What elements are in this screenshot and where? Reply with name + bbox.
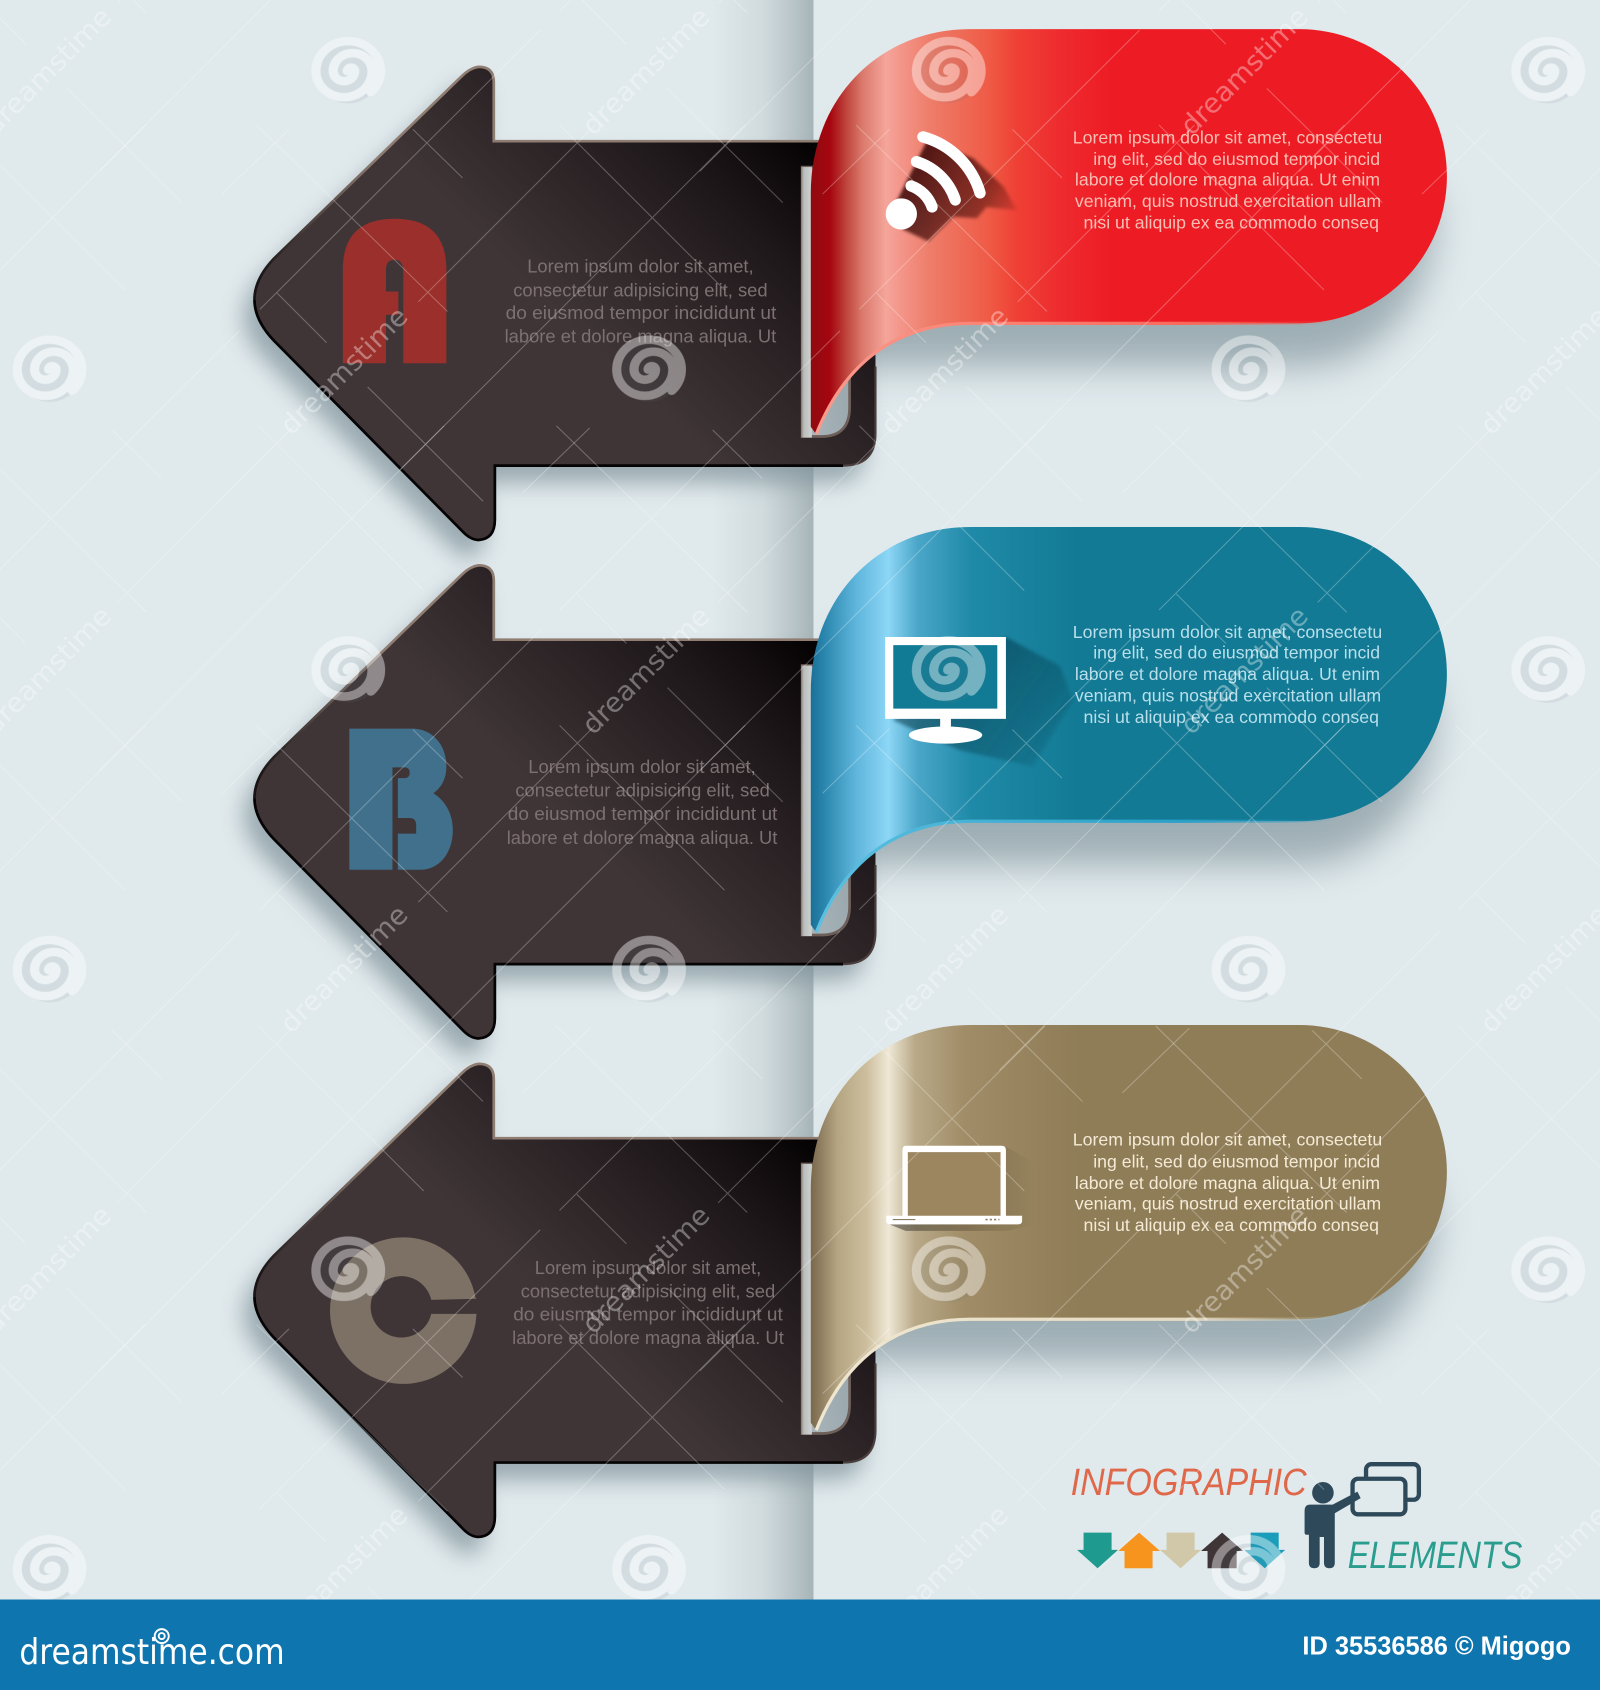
red ribbon text: ing elit, sed do eiusmod tempor incid xyxy=(1093,149,1380,169)
arrow B text xyxy=(507,756,777,848)
tan ribbon text xyxy=(1073,1130,1382,1235)
ribbon panel blue xyxy=(811,527,1447,932)
watermark words: dreamstime xyxy=(875,301,1015,441)
arrow A body xyxy=(254,67,875,540)
blue ribbon text: veniam, quis nostrud exercitation ullam xyxy=(1075,686,1381,706)
page fold shadow xyxy=(712,0,813,1606)
arrow A shadow xyxy=(244,84,865,557)
arrow A text xyxy=(505,256,776,347)
red ribbon shadow xyxy=(841,140,1434,366)
icon: wifi xyxy=(886,137,1017,241)
arrow panel C xyxy=(244,1064,875,1554)
arrow B slot xyxy=(801,666,850,936)
arrow C text: labore et dolore magna aliqua. Ut xyxy=(512,1327,784,1348)
watermark words: dreamstime xyxy=(1175,2,1315,142)
small arrow row xyxy=(1077,1533,1285,1568)
icon: laptop xyxy=(886,1146,1035,1231)
red ribbon body xyxy=(811,29,1447,434)
footer bar xyxy=(0,1599,1600,1690)
blue ribbon text: nisi ut aliquip ex ea commodo conseq xyxy=(1084,707,1379,727)
arrow A text: Lorem ipsum dolor sit amet, xyxy=(527,256,754,277)
arrow C top edge xyxy=(254,1064,830,1297)
arrow panel B xyxy=(244,565,875,1056)
arrow A slot xyxy=(801,167,850,438)
logo: infographic elements xyxy=(1071,1461,1522,1576)
arrow B text: Lorem ipsum dolor sit amet, xyxy=(528,756,756,777)
blue ribbon highlight xyxy=(816,818,1337,932)
heading: elements: ELEMENTS xyxy=(1348,1534,1522,1576)
arrow A text: consectetur adipisicing elit, sed xyxy=(513,279,768,300)
arrow A text: do eiusmod tempor incididunt ut xyxy=(506,302,776,323)
watermark words: dreamstime xyxy=(576,1200,716,1340)
footer brand spiral xyxy=(155,1629,169,1643)
icon: monitor xyxy=(885,637,1073,766)
blue ribbon body xyxy=(811,527,1447,932)
red ribbon text: nisi ut aliquip ex ea commodo conseq xyxy=(1084,212,1379,232)
icon: presenter xyxy=(1305,1464,1419,1568)
arrow panel A xyxy=(244,67,875,557)
watermark words: dreamstime xyxy=(576,601,716,741)
arrow A corner edge xyxy=(843,366,875,466)
tan ribbon text: nisi ut aliquip ex ea commodo conseq xyxy=(1084,1215,1379,1235)
heading: infographic: INFOGRAPHIC xyxy=(1071,1461,1307,1503)
arrow B bottom edge xyxy=(254,798,843,1038)
arrow B text: do eiusmod tempor incididunt ut xyxy=(508,803,777,824)
blue ribbon text: labore et dolore magna aliqua. Ut enim xyxy=(1075,664,1380,684)
blue ribbon text: Lorem ipsum dolor sit amet, consectetu xyxy=(1073,622,1382,642)
arrow C text xyxy=(512,1257,784,1348)
arrow C slot xyxy=(801,1164,850,1435)
watermark words: dreamstime xyxy=(274,301,414,441)
arrow A bottom edge xyxy=(254,300,843,540)
tan ribbon text: labore et dolore magna aliqua. Ut enim xyxy=(1075,1173,1380,1193)
watermark words: dreamstime xyxy=(1175,601,1315,741)
arrow C corner edge xyxy=(843,1363,875,1463)
watermark words: dreamstime xyxy=(875,899,1015,1039)
arrow C bottom edge xyxy=(254,1297,843,1537)
tan ribbon text: Lorem ipsum dolor sit amet, consectetu xyxy=(1073,1130,1382,1150)
arrow B text: labore et dolore magna aliqua. Ut xyxy=(507,827,777,848)
letter A xyxy=(343,219,446,363)
letter B xyxy=(349,729,453,870)
arrow B body xyxy=(254,565,875,1038)
blue ribbon shadow xyxy=(841,638,1434,864)
tan ribbon text: ing elit, sed do eiusmod tempor incid xyxy=(1093,1151,1380,1171)
tan ribbon highlight xyxy=(816,1316,1337,1430)
arrow C shadow xyxy=(244,1081,865,1554)
arrow B shadow xyxy=(244,583,865,1056)
arrow C text: do eiusmod tempor incididunt ut xyxy=(513,1303,783,1324)
red ribbon text: veniam, quis nostrud exercitation ullam xyxy=(1075,191,1381,211)
footer image id: ID 35536586 © Migogo xyxy=(1302,1632,1571,1660)
arrow B corner edge xyxy=(843,865,875,964)
letter C xyxy=(330,1237,477,1384)
red ribbon text xyxy=(1073,127,1382,232)
arrow B top edge xyxy=(254,565,830,798)
arrow A text: labore et dolore magna aliqua. Ut xyxy=(505,326,776,347)
arrow C text: Lorem ipsum dolor sit amet, xyxy=(535,1257,761,1278)
tan ribbon text: veniam, quis nostrud exercitation ullam xyxy=(1075,1193,1381,1213)
footer brand: dreamstime.com xyxy=(19,1632,285,1673)
arrow C body xyxy=(254,1064,875,1537)
arrow C text: consectetur adipisicing elit, sed xyxy=(521,1281,775,1302)
blue ribbon text xyxy=(1073,622,1382,727)
blue ribbon text: ing elit, sed do eiusmod tempor incid xyxy=(1093,643,1380,663)
watermark words: dreamstime xyxy=(875,1500,1015,1640)
red ribbon highlight xyxy=(816,320,1337,434)
tan ribbon body xyxy=(811,1025,1447,1430)
arrow B text: consectetur adipisicing elit, sed xyxy=(515,780,770,800)
watermark words: dreamstime xyxy=(576,2,716,142)
tan ribbon shadow xyxy=(841,1136,1434,1362)
arrow A top edge xyxy=(254,67,830,300)
red ribbon text: Lorem ipsum dolor sit amet, consectetu xyxy=(1073,127,1382,147)
watermark words: dreamstime xyxy=(1175,1200,1315,1340)
watermark words: dreamstime xyxy=(274,899,414,1039)
ribbon panel red xyxy=(811,29,1447,434)
red ribbon text: labore et dolore magna aliqua. Ut enim xyxy=(1075,169,1380,189)
ribbon panel tan xyxy=(811,1025,1447,1430)
watermark words: dreamstime xyxy=(274,1500,414,1640)
